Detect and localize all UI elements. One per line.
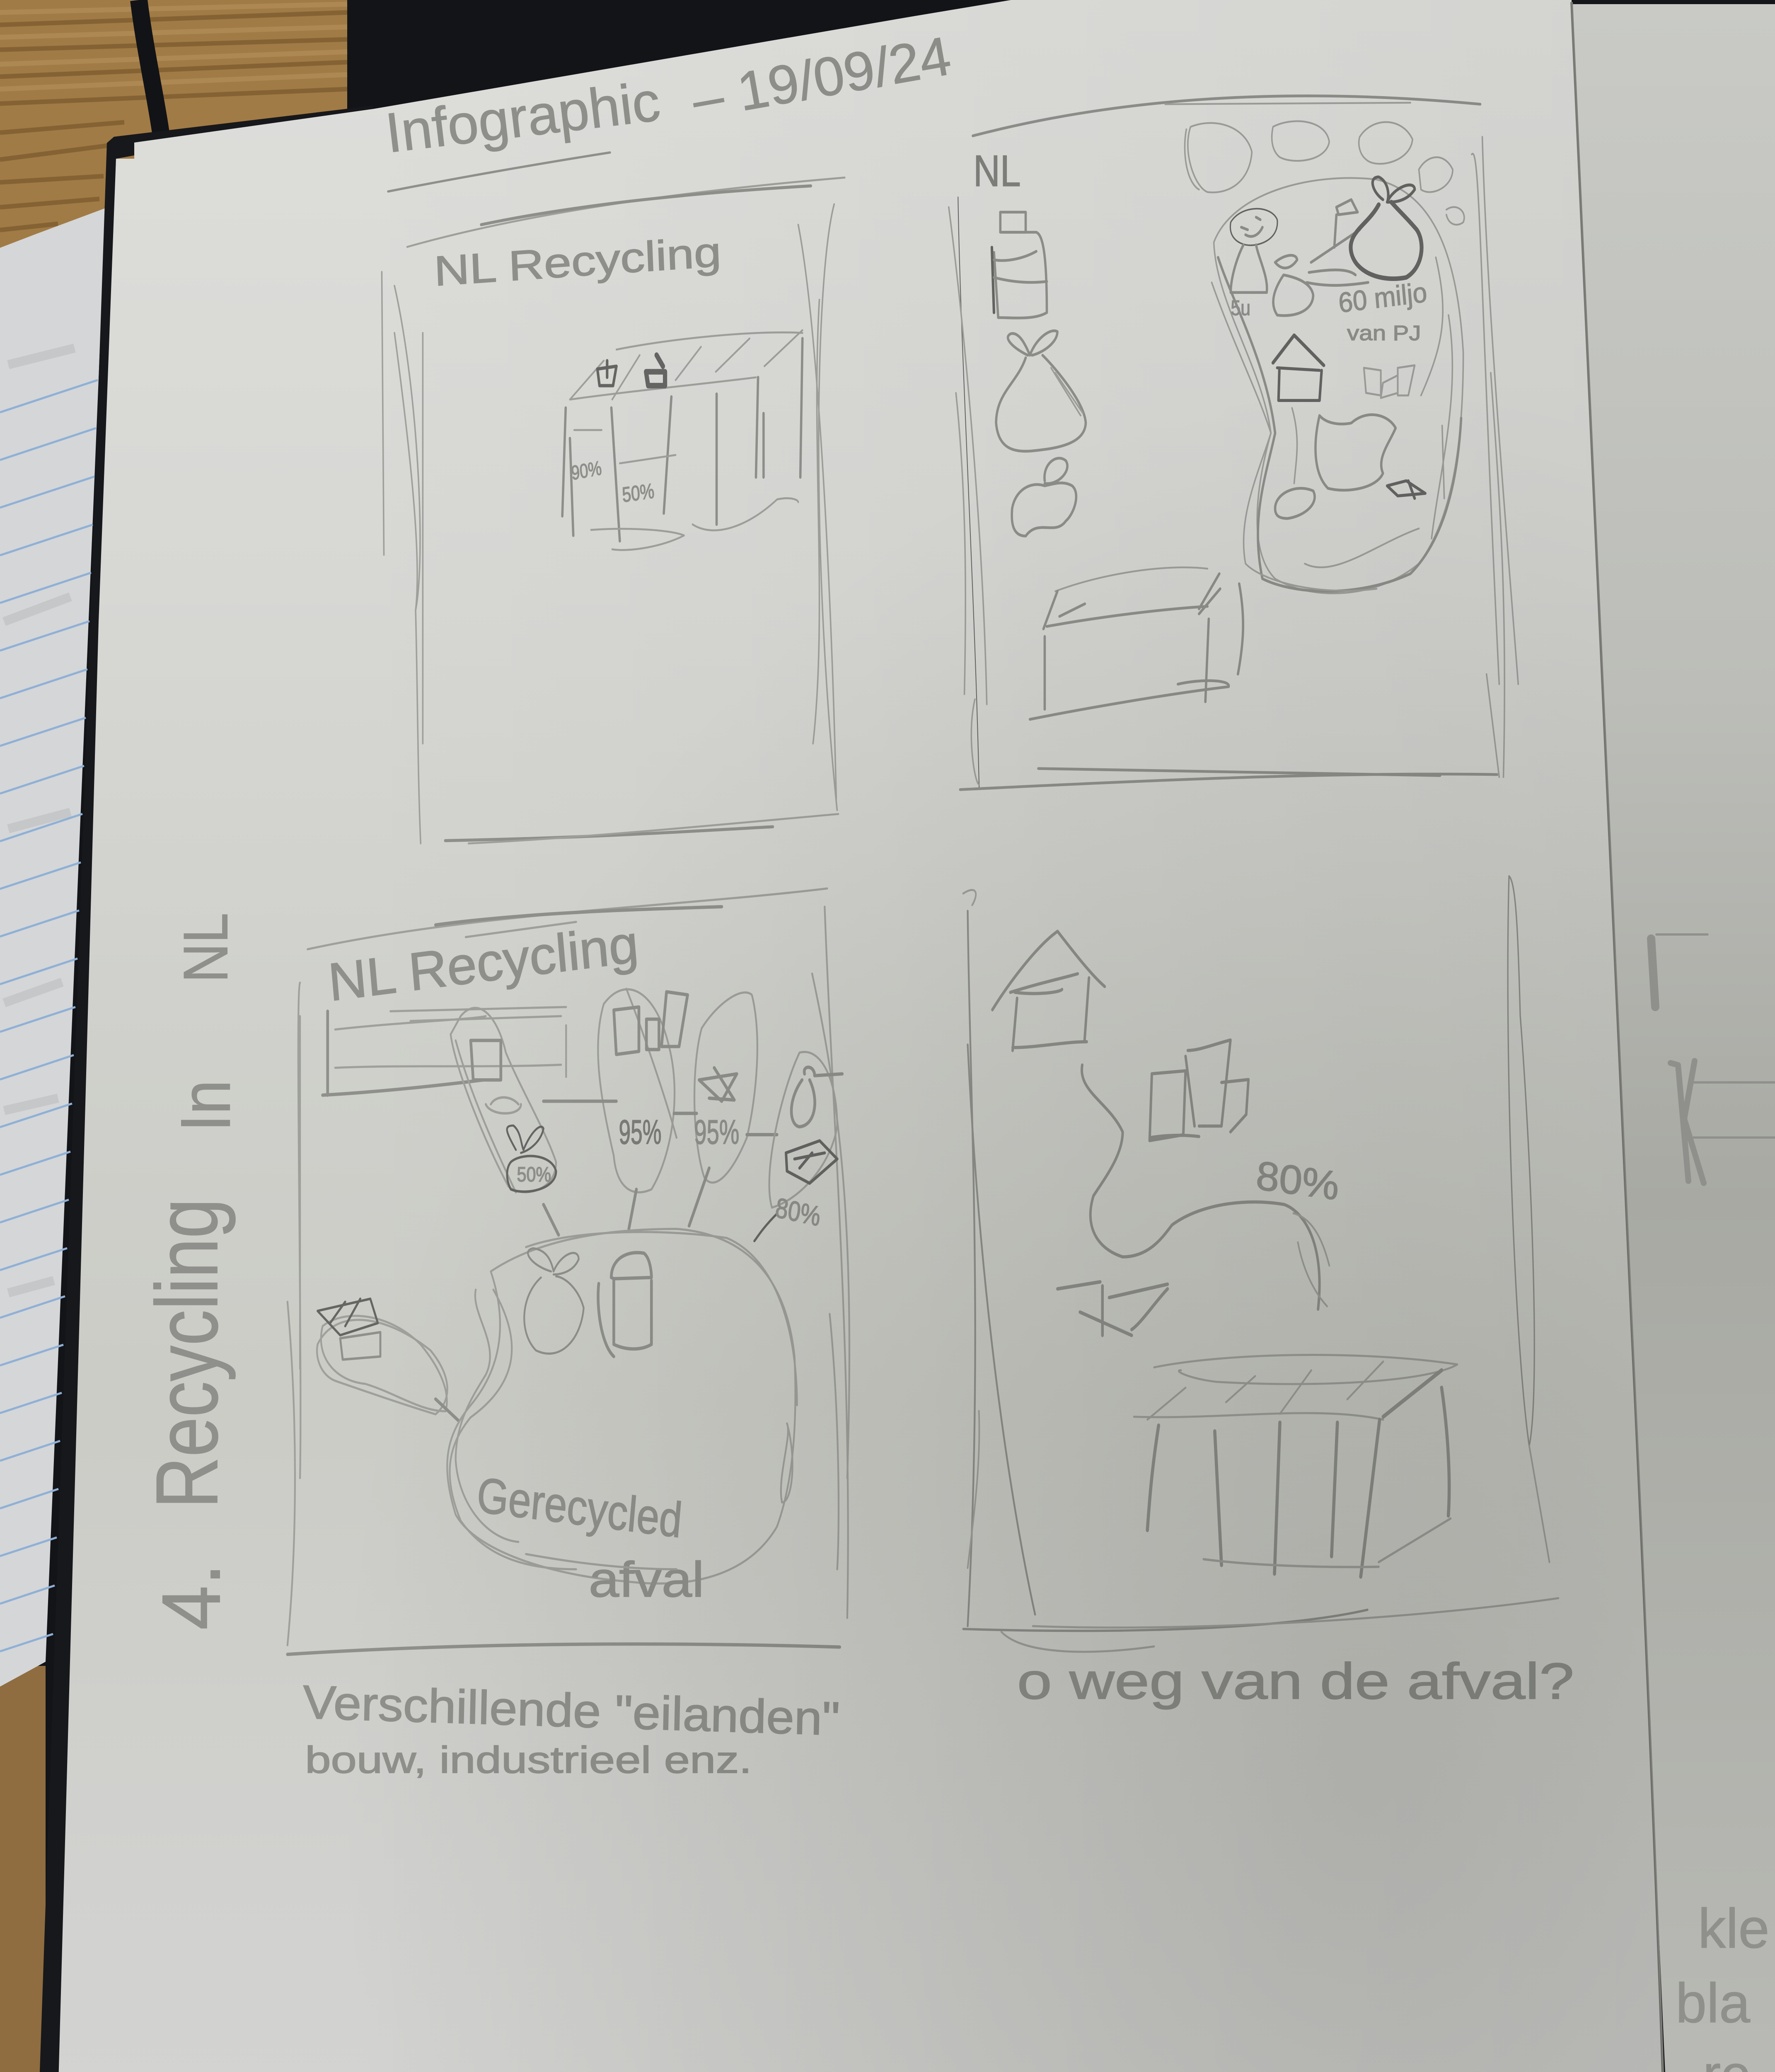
container illustration <box>562 330 803 550</box>
finger 3: box <box>674 992 777 1226</box>
frame of sketch 2 <box>949 96 1518 789</box>
label: 50%: 50% <box>517 1163 551 1186</box>
icon: small apple on foot <box>1273 255 1313 316</box>
icon: small bag <box>597 361 617 386</box>
background: wooden table left lower <box>0 1666 46 2072</box>
notebook black cover <box>34 106 398 2072</box>
icon: garbage bag <box>996 331 1086 451</box>
thumb: recycling box <box>317 1299 458 1420</box>
large blob on foot <box>1316 415 1395 490</box>
left loose lined paper <box>0 208 106 1687</box>
label: 60 miljoen PJ: 60 miljo <box>1337 276 1428 319</box>
heading: NL: NL <box>973 146 1021 196</box>
label: Gerecycled afval: Gerecycled <box>475 1467 684 1548</box>
label: 95%: 95% <box>619 1113 662 1151</box>
right page handwriting fragments: bla <box>1676 1972 1751 2034</box>
icon: apple core <box>1012 458 1076 536</box>
label: Gerecycled afval <box>475 1467 704 1607</box>
finger 2: factory <box>544 989 688 1229</box>
right page corner marks and sketch fragment <box>1651 934 1775 2072</box>
vertical heading: 4. Recycling In NL: NL <box>170 913 241 983</box>
vertical heading: 4. Recycling In NL <box>138 913 244 1630</box>
heading: Infographic date: Infographic <box>382 70 663 165</box>
icon: house on foot <box>1273 335 1324 400</box>
caption: Verschillende eilanden: Verschillende "eilanden" <box>302 1676 840 1745</box>
icon: large container <box>1030 567 1243 719</box>
right page of the notebook <box>1572 0 1775 2072</box>
palm of the hand <box>447 1229 797 1583</box>
icon: factory on foot <box>1364 366 1415 398</box>
icon: garbage bag on palm <box>524 1248 584 1353</box>
icon: dark box on foot <box>1387 481 1425 499</box>
caption: weg van de afval?: o weg van de afval? <box>1017 1653 1574 1710</box>
background: wooden table top left <box>0 0 347 257</box>
heading: Infographic date: – 19/09/24 <box>687 25 955 131</box>
label: 60 miljoen PJ: van PJ <box>1347 321 1421 345</box>
footprint outline <box>1212 178 1463 593</box>
frame of sketch 3 <box>288 888 849 1654</box>
right page handwriting fragments: kle <box>1698 1897 1770 1960</box>
icon: house <box>992 931 1105 1051</box>
heading: NL Recycling: NL Recycling <box>433 228 722 295</box>
finger 1: bag, bike <box>451 1008 559 1235</box>
right page handwriting fragments <box>1676 1897 1770 2072</box>
finger 4: bag and dark box <box>754 1052 842 1241</box>
icon: bottle <box>992 212 1047 318</box>
icon: large container <box>1134 1355 1457 1577</box>
banner scribble <box>323 1007 566 1095</box>
label: 60 miljoen PJ <box>1337 276 1428 345</box>
caption: Verschillende eilanden <box>302 1676 840 1781</box>
panel: sketch 4, route of the waste <box>963 876 1574 1710</box>
label: 95%: 95% <box>694 1113 739 1151</box>
panel: sketch 3, hand of recycled waste <box>288 888 849 1781</box>
heading: NL Recycling: NL Recycling <box>326 914 641 1013</box>
small circle on foot <box>1275 488 1315 518</box>
frame of sketch 4 <box>963 876 1558 1652</box>
gutter line <box>1572 2 1670 2072</box>
icon: dark garbage bag on foot <box>1351 177 1422 279</box>
icon: person with smiling face <box>1230 209 1277 293</box>
toes of the footprint <box>1185 121 1464 225</box>
label: 90%: 90% <box>570 457 603 484</box>
vertical heading: 4. Recycling In NL: Recycling <box>138 1198 236 1508</box>
icon: box <box>1057 1282 1168 1335</box>
panel: sketch 1, NL Recycling containers <box>382 177 845 843</box>
caption: Verschillende eilanden: bouw, industrieel enz. <box>305 1739 752 1781</box>
label: 5: 5u <box>1231 296 1250 320</box>
panel: sketch 2, footprint <box>949 96 1518 789</box>
label: 50%: 50% <box>621 479 655 507</box>
frame of sketch 1 <box>382 177 845 843</box>
route line <box>1082 1065 1320 1309</box>
icon: bottle and triangle on foot <box>1307 200 1368 286</box>
icon: bottle on palm <box>598 1253 651 1356</box>
label: 80%: 80% <box>1255 1152 1341 1209</box>
label: 80%: 80% <box>774 1192 822 1232</box>
vertical heading: 4. Recycling In NL: 4. <box>145 1563 237 1630</box>
icon: factory <box>1150 1040 1248 1140</box>
heading: Infographic date <box>382 25 955 191</box>
label: Gerecycled afval: afval <box>589 1552 704 1607</box>
route line second stroke <box>1294 1213 1329 1306</box>
top dark sliver <box>1562 0 1775 4</box>
black cable <box>139 0 161 133</box>
path line <box>1292 408 1297 483</box>
icon: small apple <box>646 355 665 386</box>
vertical heading: 4. Recycling In NL: In <box>166 1080 244 1132</box>
